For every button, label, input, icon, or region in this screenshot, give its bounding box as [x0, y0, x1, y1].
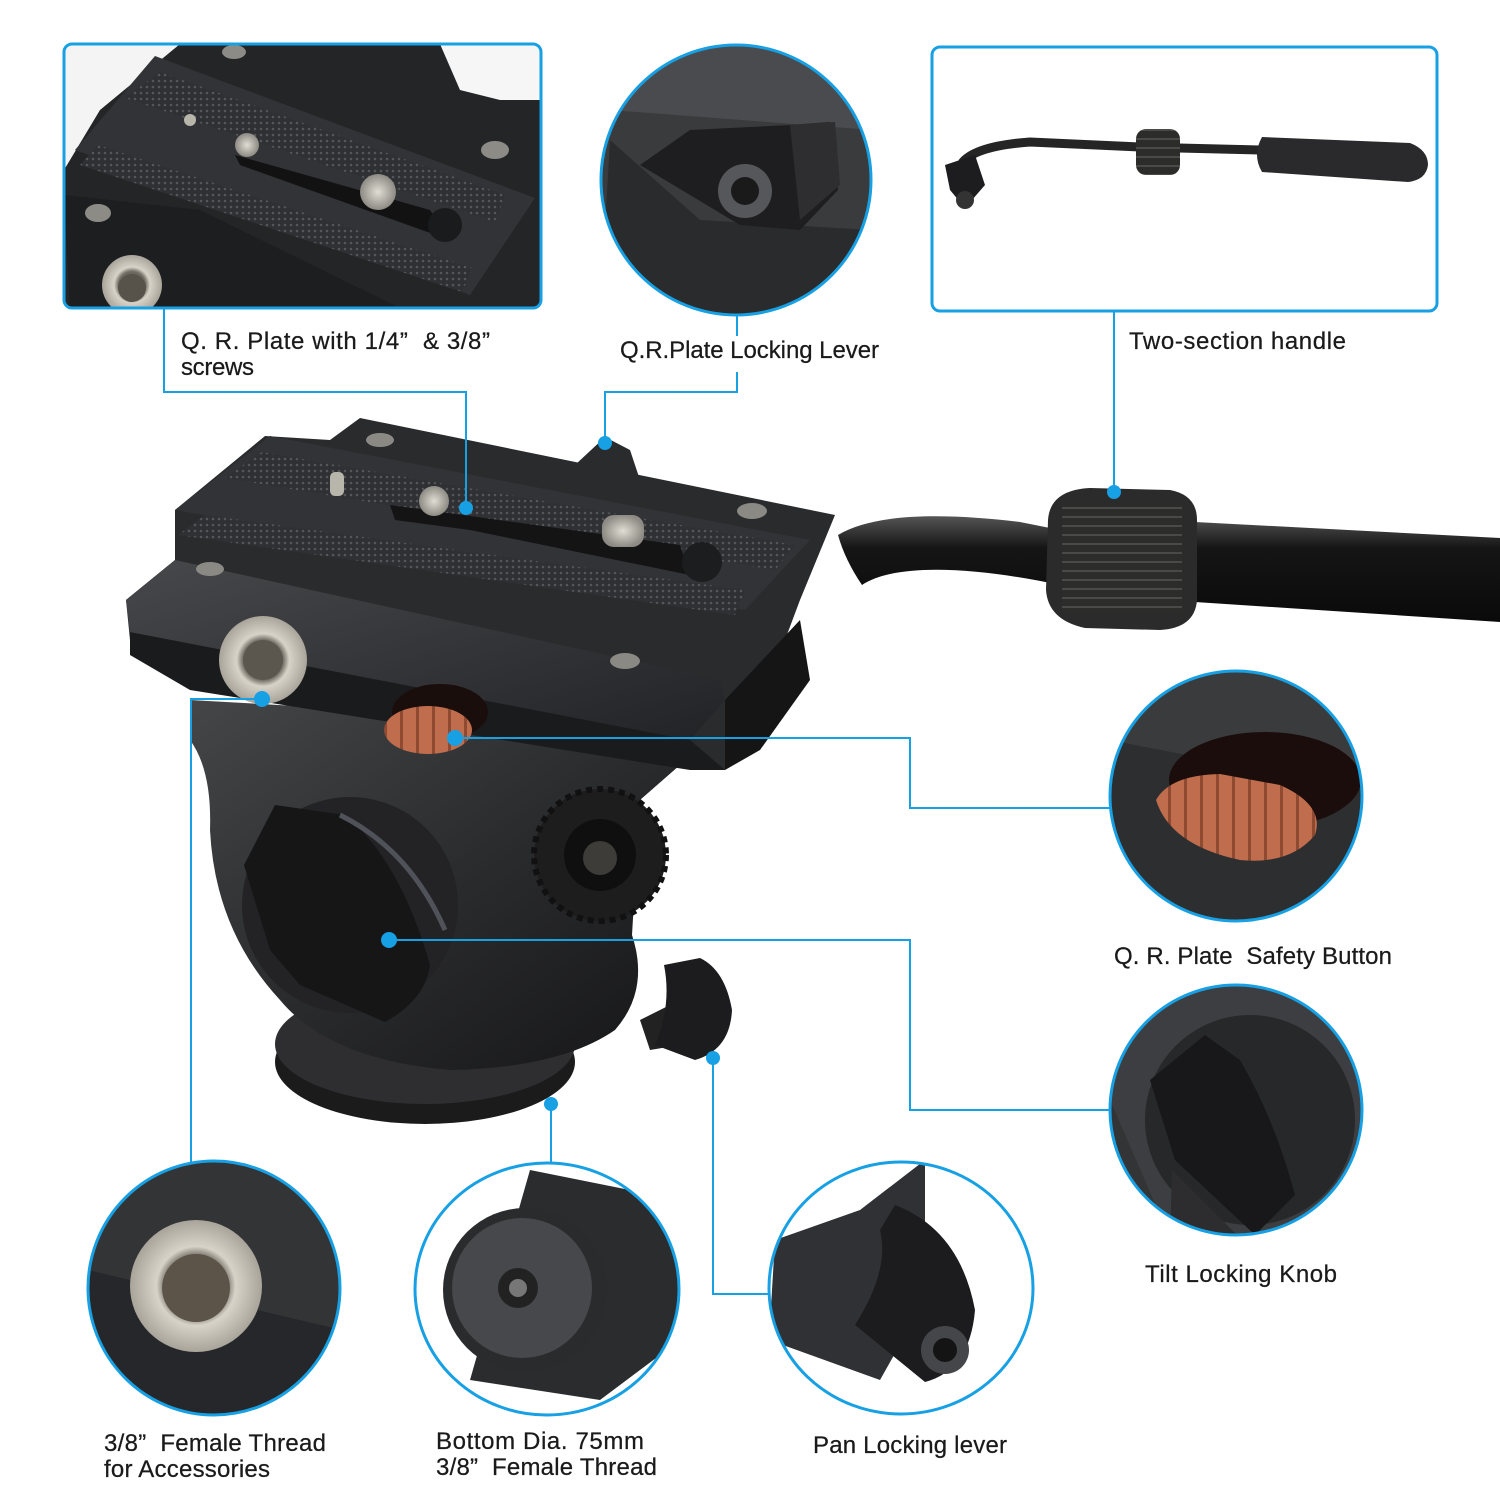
panel: two-section handle photo: [932, 47, 1437, 311]
screws on plate: [196, 433, 767, 669]
panel: safety button photo: [1110, 670, 1364, 924]
head body: [190, 700, 720, 1070]
label: plate screws: Q. R. Plate with 1/4” & 3/8”: [181, 328, 490, 355]
handle arm: [838, 488, 1500, 630]
panel: pan lever photo: [769, 1156, 1035, 1420]
label: bottom diameter: 3/8” Female Thread: [436, 1454, 657, 1481]
label: bottom diameter: [436, 1428, 657, 1481]
label: tilt knob: Tilt Locking Knob: [1145, 1261, 1337, 1288]
upper platform: [126, 418, 835, 770]
top sliding plate: [175, 436, 810, 610]
tripod head product photo: [126, 418, 1500, 1124]
label: locking lever: Q.R.Plate Locking Lever: [620, 337, 879, 364]
rosette mount: [534, 789, 666, 921]
label: bottom diameter: Bottom Dia. 75mm: [436, 1428, 644, 1455]
label: plate screws: [181, 328, 490, 381]
panel: quick release plate photo: [64, 44, 541, 315]
rear lever top: [575, 437, 640, 480]
pan lock lever: [640, 958, 732, 1060]
side mount right: [725, 620, 810, 770]
label: plate screws: screws: [181, 354, 254, 381]
label: female thread: [104, 1430, 326, 1483]
label: pan lever: Pan Locking lever: [813, 1432, 1007, 1459]
panel: tilt knob photo: [1110, 984, 1364, 1238]
panel: bottom view photo: [414, 1156, 680, 1420]
base plate: [275, 984, 575, 1124]
callout lines and dots: [164, 308, 1121, 1294]
tilt knob: [242, 797, 458, 1022]
label: female thread: 3/8” Female Thread: [104, 1430, 326, 1457]
label: handle: Two-section handle: [1129, 328, 1346, 355]
safety button: [384, 684, 488, 754]
panel: locking lever photo: [600, 44, 872, 316]
label: female thread: for Accessories: [104, 1456, 270, 1483]
label: safety button: Q. R. Plate Safety Button: [1114, 943, 1392, 970]
female thread insert: [219, 616, 307, 704]
panel: female thread photo: [88, 1160, 342, 1416]
